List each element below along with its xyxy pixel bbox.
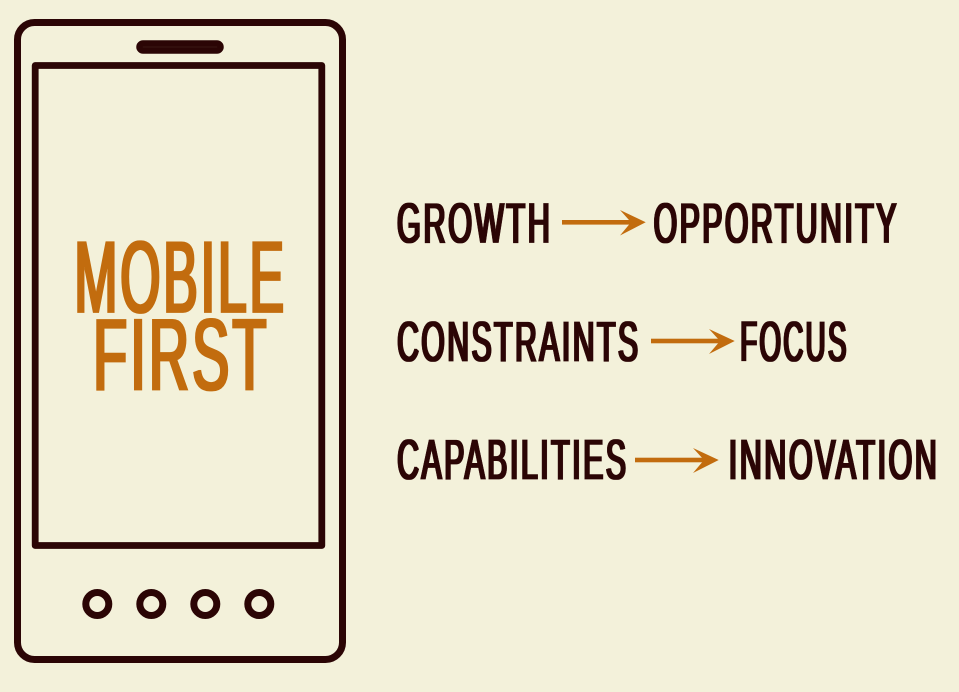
arrow: [562, 210, 646, 236]
title: Mobile First: MOBILE: [74, 222, 287, 334]
phone screen: [35, 66, 322, 546]
row: constraints to focus: CONSTRAINTS: [397, 310, 641, 374]
icon: smartphone: [18, 22, 342, 660]
phone buttons: [86, 592, 271, 616]
phone speaker: [140, 44, 220, 50]
title: Mobile First: [74, 222, 287, 411]
row: capabilities to innovation: CAPABILITIES: [397, 428, 629, 492]
arrow: [635, 448, 719, 473]
row: growth to opportunity: GROWTH: [397, 192, 553, 256]
text: FOCUS: [740, 310, 849, 374]
row: growth to opportunity: [397, 192, 899, 256]
phone body: [18, 22, 342, 660]
arrow: [651, 329, 735, 354]
title: Mobile First: FIRST: [93, 299, 270, 411]
